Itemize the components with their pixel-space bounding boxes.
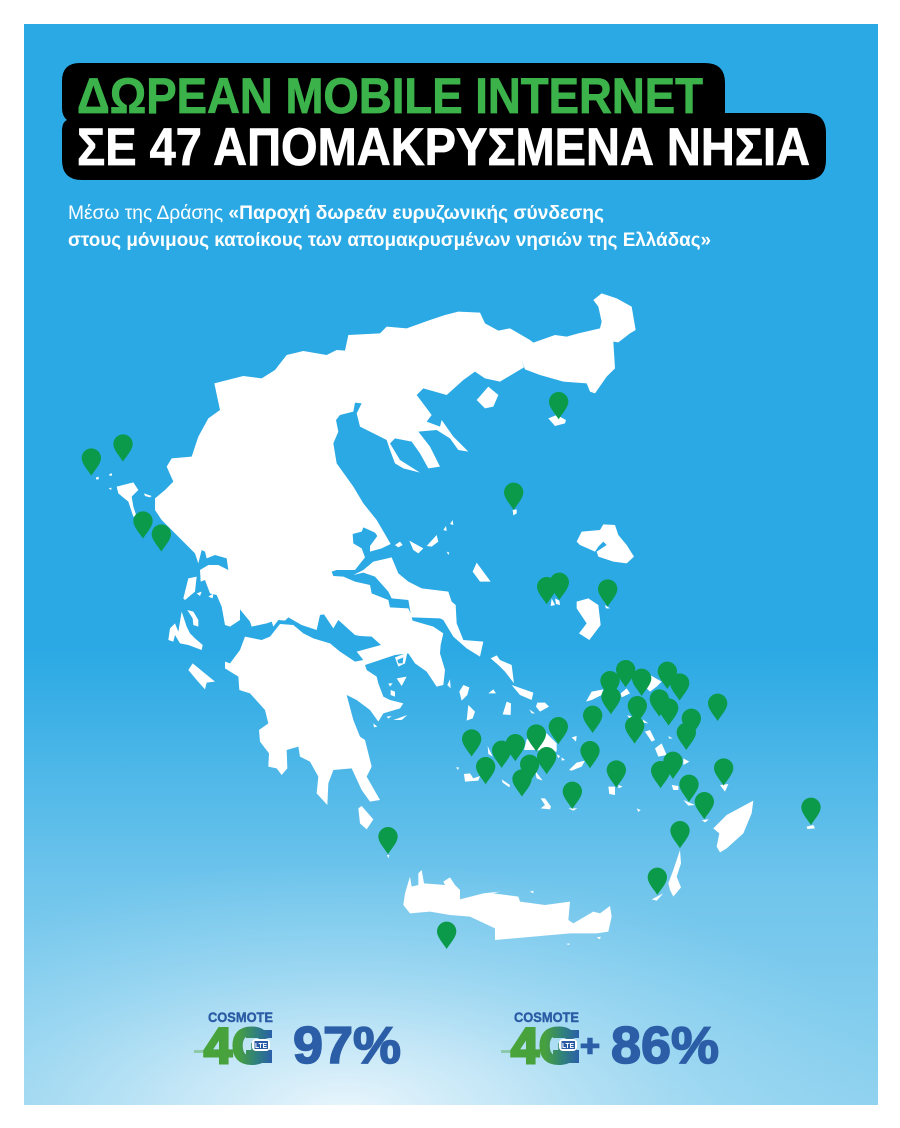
86 percent: 86% <box>611 1017 719 1075</box>
COSMOTE 4G+ logo: + <box>580 1030 600 1063</box>
map of Greece <box>96 293 815 945</box>
subtitle <box>68 203 711 251</box>
Cosmote 4G+ stat <box>501 1010 719 1075</box>
Ionian islands <box>96 473 215 689</box>
map pins <box>82 392 821 949</box>
Crete <box>403 870 612 945</box>
COSMOTE 4G+ logo: COSMOTE <box>514 1010 579 1025</box>
COSMOTE 4G logo: LTE <box>255 1043 267 1050</box>
Argo-Saronic islands and Kythira <box>358 653 451 858</box>
title line 1: ΔΩΡΕΑΝ MOBILE INTERNET <box>77 68 703 124</box>
COSMOTE 4G+ logo: 4G <box>511 1018 578 1074</box>
97 percent: 97% <box>293 1017 401 1075</box>
mainland <box>155 293 636 805</box>
north and east Aegean islands <box>395 387 634 640</box>
COSMOTE 4G+ logo: LTE <box>562 1043 574 1050</box>
COSMOTE 4G logo: 4G <box>204 1018 271 1074</box>
Cyclades and Dodecanese <box>456 655 815 901</box>
COSMOTE 4G+ logo <box>501 1010 600 1074</box>
title block <box>62 63 826 180</box>
subtitle: στους μόνιμους κατοίκους των απομακρυσμένων νησιών της Ελλάδας» <box>68 230 711 251</box>
Cosmote 4G stat <box>194 1010 401 1075</box>
COSMOTE 4G logo: COSMOTE <box>208 1010 273 1025</box>
title background pill <box>62 63 826 180</box>
title line 2: ΣΕ 47 ΑΠΟΜΑΚΡΥΣΜΕΝΑ ΝΗΣΙΑ <box>77 118 810 177</box>
subtitle: Μέσω της Δράσης «Παροχή δωρεάν ευρυζωνικής σύνδεσης <box>68 203 604 224</box>
